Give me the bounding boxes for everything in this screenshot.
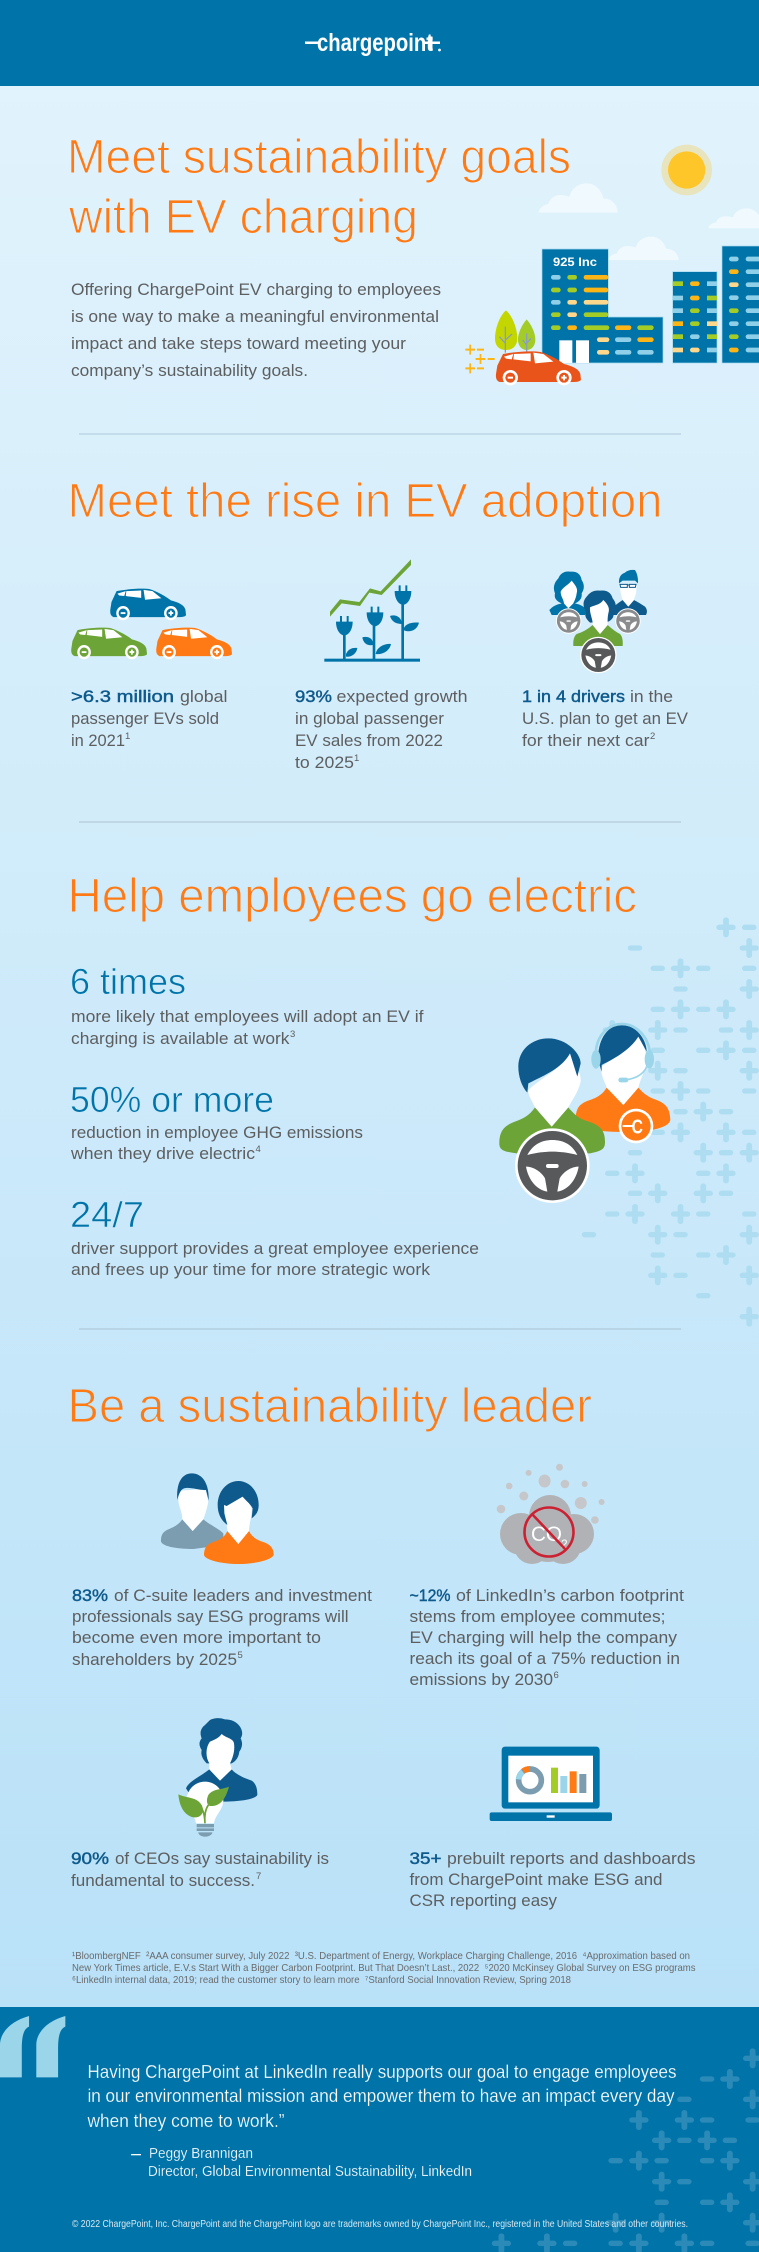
icon: plus and minus signs (465, 345, 495, 373)
footnotes: ⁶LinkedIn internal data, 2019; read the customer story to learn more ⁷Stanford Social Innovation Review, Spring 2018 (72, 1974, 571, 1986)
stat: 1 in 4 drivers: in the (630, 687, 673, 706)
stat: 12% of LinkedIn's carbon footprint: emissions by 2030 (410, 1670, 553, 1689)
divider (79, 821, 681, 823)
stat: 24/7: and frees up your time for more strategic work (71, 1260, 431, 1279)
icon: growth line with plug plants (324, 559, 420, 662)
stat: 6 times: 6 times (70, 961, 186, 1002)
stat: 6 times: charging is available at work (71, 1029, 290, 1048)
heading: be a sustainability leader: Be a sustainability leader (68, 1380, 592, 1433)
stat: 35+ prebuilt reports: CSR reporting easy (410, 1891, 557, 1910)
icon: quotation mark (0, 2016, 65, 2077)
stat: 90% of CEOs: of CEOs say sustainability is (115, 1849, 329, 1868)
stat: 90% of CEOs: fundamental to success. (71, 1871, 255, 1890)
heading: meet sustainability goals (67, 131, 571, 244)
stat: 50% or more: when they drive electric (70, 1144, 256, 1163)
quote attribution: Director, Global Environmental Sustainability, LinkedIn (148, 2163, 472, 2180)
stat: 6.3 million EVs: passenger EVs sold (71, 709, 219, 728)
stat: 83% of C-suite leaders (72, 1586, 372, 1669)
stat: 12% of LinkedIn's carbon footprint: ~12% (410, 1586, 450, 1605)
bar chart (551, 1768, 586, 1793)
stat: 93% growth: expected growth (336, 687, 468, 706)
stat: 50% or more: 50% or more (70, 1079, 274, 1120)
donut chart (519, 1769, 541, 1792)
stat: 93% growth: 1 (354, 753, 359, 764)
stat: 83% of C-suite leaders: professionals say ESG programs will (72, 1607, 348, 1626)
support agent: C (632, 1116, 643, 1138)
divider (79, 1328, 681, 1330)
intro paragraph (71, 280, 441, 380)
icon: C-suite man and woman (161, 1473, 274, 1564)
support agent (576, 1024, 670, 1143)
heading: meet the rise in EV adoption: Meet the rise in EV adoption (68, 475, 662, 528)
stat: 6.3 million EVs: in 2021 (71, 731, 125, 750)
stat: 1 in 4 drivers: U.S. plan to get an EV (522, 709, 689, 728)
footer band (0, 2007, 759, 2252)
icon: three electric cars (71, 589, 232, 659)
stat: 35+ prebuilt reports: 35+ (410, 1849, 442, 1868)
background pattern: footer plus and minus signs (492, 2048, 759, 2252)
stat: 6.3 million EVs: global (180, 687, 228, 706)
CO2 label: 2 (561, 1537, 568, 1551)
icon: CEO with plant light bulb (178, 1718, 257, 1837)
stat: 35+ prebuilt reports: prebuilt reports and dashboards (447, 1849, 696, 1868)
stat: 1 in 4 drivers: for their next car (522, 731, 650, 750)
heading: help employees go electric: Help employees go electric (68, 870, 637, 923)
stat: 35+ prebuilt reports (410, 1849, 696, 1910)
icon: orange car (496, 351, 581, 385)
stat: 6 times: more likely that employees will adopt an EV if (71, 1007, 424, 1026)
cloud (500, 1495, 594, 1564)
stat: 12% of LinkedIn's carbon footprint: of LinkedIn’s carbon footprint (456, 1586, 684, 1605)
stat: 83% of C-suite leaders: 5 (238, 1650, 243, 1661)
stat: 83% of C-suite leaders: shareholders by 2025 (72, 1650, 237, 1669)
stat: 50% or more: reduction in employee GHG emissions (71, 1123, 363, 1142)
smoke dots (497, 1464, 605, 1524)
clouds (539, 183, 759, 260)
stat: 93% growth: 93% (295, 687, 332, 706)
woman (204, 1481, 274, 1564)
quote text: in our environmental mission and empower them to have an impact every day (88, 2085, 675, 2106)
grey steering wheels (556, 608, 641, 634)
buildings: 925 Inc (553, 255, 597, 269)
CO2 label: CO (531, 1523, 562, 1546)
quote attribution (131, 2145, 472, 2180)
prohibition sign (524, 1508, 574, 1556)
driver: man with glasses (610, 570, 647, 615)
driver: woman (549, 572, 587, 615)
icon: three drivers with steering wheels (549, 570, 647, 673)
intro paragraph: company’s sustainability goals. (71, 361, 308, 380)
stat: 93% growth: to 2025 (295, 753, 354, 772)
stat: 93% growth: in global passenger (295, 709, 444, 728)
stat: 83% of C-suite leaders: 83% (72, 1586, 108, 1605)
heading: meet sustainability goals: Meet sustainability goals (67, 131, 571, 184)
stat: 90% of CEOs (71, 1849, 329, 1890)
stat: 1 in 4 drivers (522, 687, 689, 750)
intro paragraph: is one way to make a meaningful environmental (71, 307, 439, 326)
stat: 24/7: driver support provides a great employee experience (71, 1239, 479, 1258)
stat: 12% of LinkedIn's carbon footprint (410, 1586, 684, 1689)
icon: laptop with charts (490, 1747, 612, 1821)
background pattern: plus and minus signs (582, 917, 759, 1327)
divider (79, 433, 681, 435)
stat: 35+ prebuilt reports: from ChargePoint make ESG and (410, 1870, 662, 1889)
footnotes (72, 1950, 696, 1986)
stat: 83% of C-suite leaders: become even more important to (72, 1628, 321, 1647)
stat: 1 in 4 drivers: 1 in 4 drivers (522, 687, 625, 706)
stat: 12% of LinkedIn's carbon footprint: EV charging will help the company (410, 1628, 678, 1647)
header band (0, 0, 759, 86)
driver (499, 1038, 605, 1203)
buildings (542, 246, 759, 363)
icon: sun (661, 145, 712, 195)
quote text (87, 2061, 677, 2131)
icon: trees (495, 310, 535, 353)
stat: 93% growth: EV sales from 2022 (295, 731, 443, 750)
stat: 50% or more: 4 (256, 1144, 261, 1155)
stat: 6 times: 3 (290, 1029, 295, 1040)
icon: driver and support agent (499, 1024, 670, 1203)
illustration: office buildings, car, trees, sun (465, 145, 759, 385)
stat: 24/7: 24/7 (70, 1194, 144, 1235)
man (161, 1473, 223, 1549)
footnotes: New York Times article, E.V.s Start With a Bigger Carbon Footprint. But That Doesn’t Last., 2022 ⁵2020 McKinsey Global Survey on ESG programs (72, 1962, 696, 1974)
stat: 90% of CEOs: 90% (71, 1849, 109, 1868)
stat: 6.3 million EVs: >6.3 million (71, 687, 174, 706)
stat: 24/7 (70, 1194, 479, 1279)
stat: 12% of LinkedIn's carbon footprint: reach its goal of a 75% reduction in (410, 1649, 680, 1668)
stat: 50% or more (70, 1079, 363, 1163)
stat: 1 in 4 drivers: 2 (650, 731, 655, 742)
stat: 6 times (70, 961, 424, 1048)
quote attribution: Peggy Brannigan (149, 2145, 253, 2162)
heading: meet sustainability goals: with EV charging (68, 191, 418, 244)
footnotes: ¹BloombergNEF ²AAA consumer survey, July 2022 ³U.S. Department of Energy, Workplace Charging Challenge, 2016 ⁴Approximation based on (72, 1950, 690, 1962)
stat: 83% of C-suite leaders: of C-suite leaders and investment (114, 1586, 372, 1605)
quote text: Having ChargePoint at LinkedIn really supports our goal to engage employees (88, 2061, 676, 2082)
stat: 12% of LinkedIn's carbon footprint: 6 (554, 1670, 559, 1681)
stat: 6.3 million EVs: 1 (125, 731, 130, 742)
stat: 93% growth (295, 687, 468, 772)
quote text: when they come to work.” (87, 2110, 284, 2131)
stat: 12% of LinkedIn's carbon footprint: stems from employee commutes; (410, 1607, 666, 1626)
icon: no CO2 cloud (497, 1464, 605, 1564)
stat: 6.3 million EVs (71, 687, 228, 750)
intro paragraph: impact and take steps toward meeting your (71, 334, 406, 353)
CO2 label (531, 1523, 568, 1551)
logo: chargepoint (317, 29, 434, 57)
stat: 90% of CEOs: 7 (256, 1871, 261, 1882)
intro paragraph: Offering ChargePoint EV charging to employees (71, 280, 441, 299)
driver: front person (573, 590, 623, 673)
